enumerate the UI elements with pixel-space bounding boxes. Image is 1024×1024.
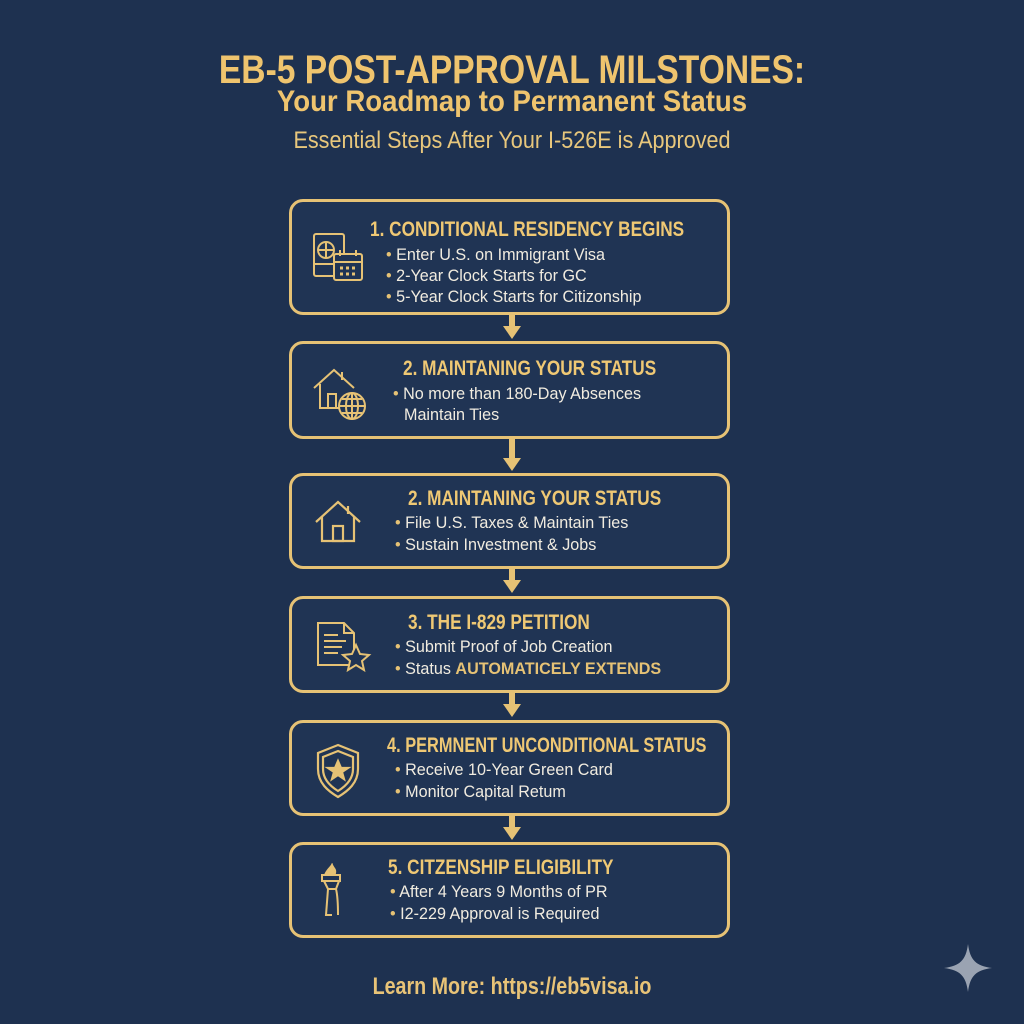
panel: step 1: • 2-Year Clock Starts for GC — [386, 266, 587, 285]
panel: step 2a — [289, 341, 730, 439]
panel: step 3: • Status AUTOMATICELY EXTENDS — [395, 659, 661, 678]
title: EB-5 POST-APPROVAL MILSTONES: — [219, 48, 805, 92]
arrow — [503, 315, 521, 339]
icon: sparkle — [944, 944, 992, 992]
bullets: • Enter U.S. on Immigrant Visa — [386, 245, 605, 264]
arrow — [503, 439, 521, 471]
panel: step 2b: • Sustain Investment & Jobs — [395, 535, 596, 554]
bullets: • After 4 Years 9 Months of PR — [390, 882, 608, 901]
icon: passport calendar — [313, 233, 363, 281]
icon: shield star — [316, 744, 360, 798]
icon: house — [315, 500, 361, 542]
panel: step 2b — [289, 473, 730, 569]
arrow — [503, 693, 521, 717]
tagline: Essential Steps After Your I-526E is Approved — [293, 127, 731, 154]
heading: 2. MAINTANING YOUR STATUS — [408, 487, 661, 510]
panel: step 5: • I2-229 Approval is Required — [390, 904, 599, 923]
panel: step 1: • 5-Year Clock Starts for Citizonship — [386, 287, 641, 306]
bullets: • No more than 180-Day Absences — [393, 384, 641, 403]
heading: 4. PERMNENT UNCONDITIONAL STATUS — [387, 734, 706, 757]
bullets: • Receive 10-Year Green Card — [395, 760, 613, 779]
panel: step 4: • Monitor Capital Retum — [395, 782, 566, 801]
panel: step 1 — [289, 199, 730, 315]
panel: step 3 — [289, 596, 730, 693]
panel: step 4 — [289, 720, 730, 816]
heading: 2. MAINTANING YOUR STATUS — [403, 357, 656, 380]
heading: 3. THE I-829 PETITION — [408, 611, 590, 634]
icon: document star — [317, 622, 372, 672]
arrow — [503, 569, 521, 593]
subtitle: Your Roadmap to Permanent Status — [277, 85, 747, 118]
icon: house globe — [313, 368, 366, 420]
heading: 5. CITZENSHIP ELIGIBILITY — [388, 856, 613, 879]
panel: step 2a: Maintain Ties — [404, 405, 499, 424]
panel: step 5 — [289, 842, 730, 938]
icon: torch — [321, 863, 341, 916]
bullets: • Submit Proof of Job Creation — [395, 637, 613, 656]
bullets: • File U.S. Taxes & Maintain Ties — [395, 513, 628, 532]
heading: 1. CONDITIONAL RESIDENCY BEGINS — [370, 218, 684, 241]
footer link: Learn More: https://eb5visa.io — [373, 973, 651, 1000]
arrow — [503, 816, 521, 840]
